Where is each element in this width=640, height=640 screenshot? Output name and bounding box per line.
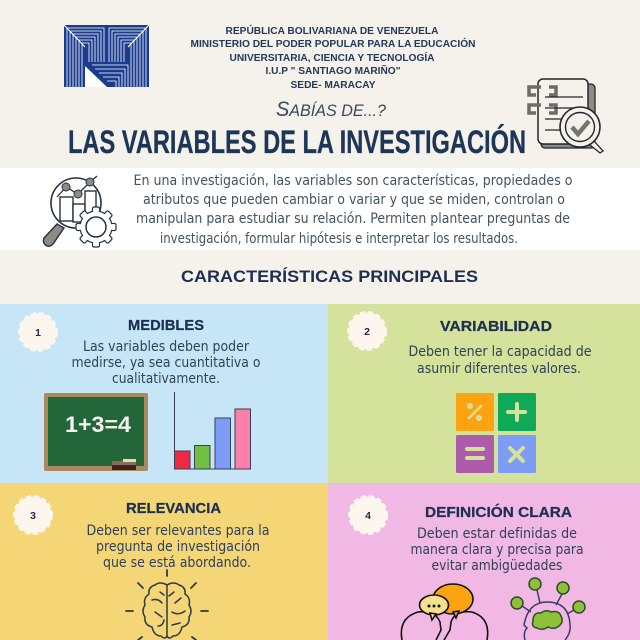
section heading: CARACTERÍSTICAS PRINCIPALES (181, 267, 478, 286)
body text: pregunta de investigación (96, 539, 260, 555)
badge 4 (350, 496, 386, 534)
panel: medibles (0, 304, 328, 483)
badge 2 (348, 312, 386, 350)
body text (410, 526, 584, 574)
icon: head with connected nodes (511, 578, 585, 640)
body text: medirse, ya sea cuantitativa o (72, 355, 260, 371)
badge 3: 3 (30, 510, 36, 522)
body text: asumir diferentes valores. (417, 361, 581, 377)
panel: relevancia (0, 483, 328, 640)
intro paragraph: investigación, formular hipótesis e interpretar los resultados. (160, 231, 518, 247)
body text: que se está abordando. (103, 555, 251, 571)
badge 3 (14, 496, 52, 534)
panel: variabilidad (328, 304, 640, 483)
body text: Deben estar definidas de (417, 526, 577, 542)
header institution text: I.U.P " SANTIAGO MARIÑO" (266, 64, 401, 77)
header institution text: SEDE- MARACAY (290, 79, 376, 91)
body text (408, 344, 592, 377)
intro paragraph (134, 173, 572, 247)
header institution text (190, 24, 476, 91)
intro paragraph: En una investigación, las variables son características, propiedades o (134, 173, 572, 189)
body text: Las variables deben poder (83, 339, 249, 355)
body text (72, 339, 260, 387)
header institution text: MINISTERIO DEL PODER POPULAR PARA LA EDUCACIÓN (190, 37, 476, 50)
icon: brain with rays (126, 570, 208, 640)
body text: Deben ser relevantes para la (86, 523, 270, 539)
heading: VARIABILIDAD (440, 319, 552, 335)
bar chart (174, 392, 250, 469)
body text: Deben tener la capacidad de (408, 344, 592, 360)
body text (86, 523, 270, 571)
heading: DEFINICIÓN CLARA (425, 503, 573, 521)
panel: definicion clara (328, 483, 640, 640)
panel: intro band (0, 168, 640, 250)
logo (64, 25, 149, 87)
icon: analysis magnifier and gear (43, 176, 116, 247)
heading: MEDIBLES (128, 318, 204, 334)
icon: document with magnifier (529, 79, 603, 153)
header institution text: REPÚBLICA BOLIVARIANA DE VENEZUELA (226, 24, 439, 37)
badge 2: 2 (364, 326, 370, 338)
body text: manera clara y precisa para (410, 542, 584, 558)
badge 1: 1 (35, 327, 41, 339)
intro paragraph: manipulan para estudiar su relación. Permiten plantear preguntas de (136, 211, 570, 227)
header institution text: UNIVERSITARIA, CIENCIA Y TECNOLOGÍA (230, 51, 435, 64)
badge 4: 4 (365, 510, 371, 522)
icon: two heads with speech bubbles (401, 584, 488, 640)
body text: evitar ambigüedades (432, 558, 562, 574)
subtitle: SABÍAS DE...? (276, 98, 387, 121)
icon: math tiles (456, 393, 536, 473)
icon: chalkboard: 1+3=4 (65, 412, 132, 437)
heading: RELEVANCIA (126, 501, 222, 517)
intro paragraph: atributos que pueden cambiar o variar y que se miden, controlan o (143, 192, 565, 208)
body text: cualitativamente. (112, 371, 220, 387)
badge 1 (20, 314, 56, 350)
icon: chalkboard (44, 393, 148, 471)
